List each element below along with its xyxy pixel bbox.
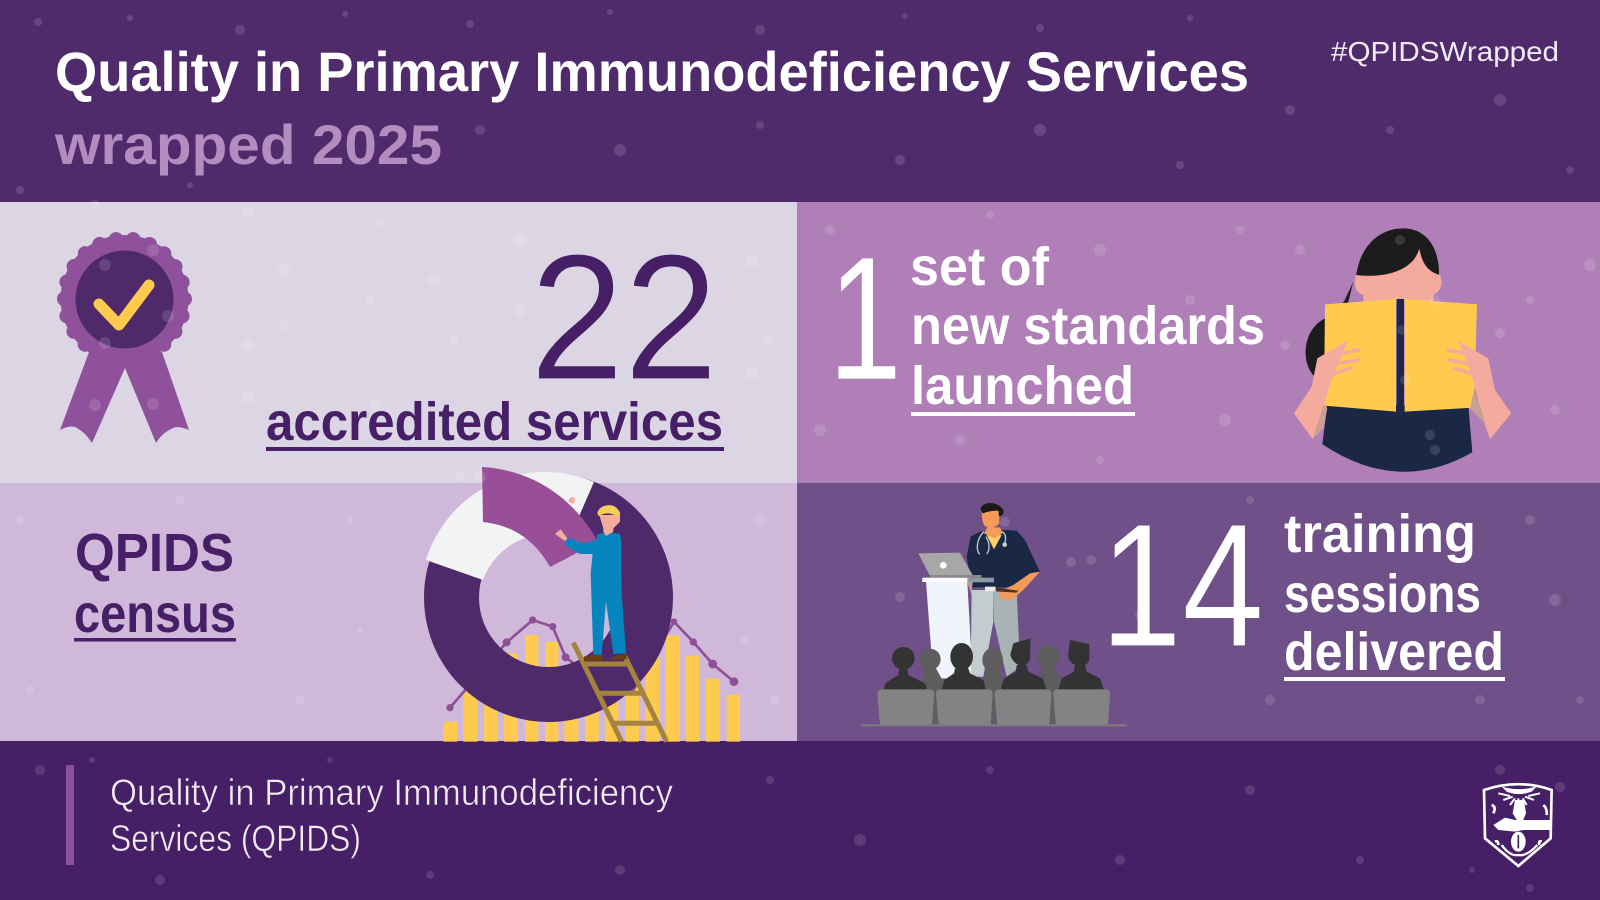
- label: training sessions delivered: [1284, 504, 1505, 682]
- panel: QPIDS census: [0, 467, 797, 742]
- label: QPIDS census: [74, 523, 236, 644]
- label: set of new standards launched: launched: [911, 356, 1134, 416]
- number: 22: 22: [530, 217, 718, 417]
- chart: lifted donut segment: [482, 467, 598, 567]
- icon: rosette ribbon: [60, 235, 189, 443]
- footer text: Services (QPIDS): [110, 818, 361, 859]
- footer bar accent: [66, 765, 74, 865]
- label: training sessions delivered: training: [1284, 504, 1476, 564]
- icon: person on a ladder: [555, 497, 667, 742]
- title: Quality in Primary Immunodeficiency Services: [55, 40, 1249, 103]
- number: 14: 14: [1100, 488, 1264, 684]
- panel: accredited services: [0, 202, 797, 483]
- icon: person reading a book: [1294, 228, 1511, 472]
- icon: presenter at lectern with audience: [861, 503, 1127, 726]
- chart: bar chart with trend line: [443, 616, 740, 742]
- panel: new standards: [797, 202, 1600, 483]
- chart: donut chart: [426, 467, 646, 694]
- hashtag: #QPIDSWrapped: [1331, 36, 1559, 67]
- title: [54, 40, 1249, 176]
- footer text: [110, 772, 673, 859]
- label: QPIDS census: QPIDS: [75, 523, 234, 583]
- icon: crest shield: [1484, 784, 1552, 866]
- panel: training sessions: [797, 483, 1600, 741]
- label: training sessions delivered: sessions: [1284, 564, 1481, 624]
- label: training sessions delivered: delivered: [1284, 622, 1504, 682]
- subtitle: wrapped 2025: wrapped 2025: [54, 113, 442, 176]
- label: set of new standards launched: [910, 237, 1265, 416]
- label: accredited services: accredited services: [266, 392, 723, 452]
- footer text: Quality in Primary Immunodeficiency: [110, 772, 673, 813]
- label: QPIDS census: census: [74, 584, 236, 644]
- label: set of new standards launched: new standards: [911, 296, 1265, 356]
- number: 1: 1: [828, 221, 902, 417]
- label: set of new standards launched: set of: [910, 237, 1050, 297]
